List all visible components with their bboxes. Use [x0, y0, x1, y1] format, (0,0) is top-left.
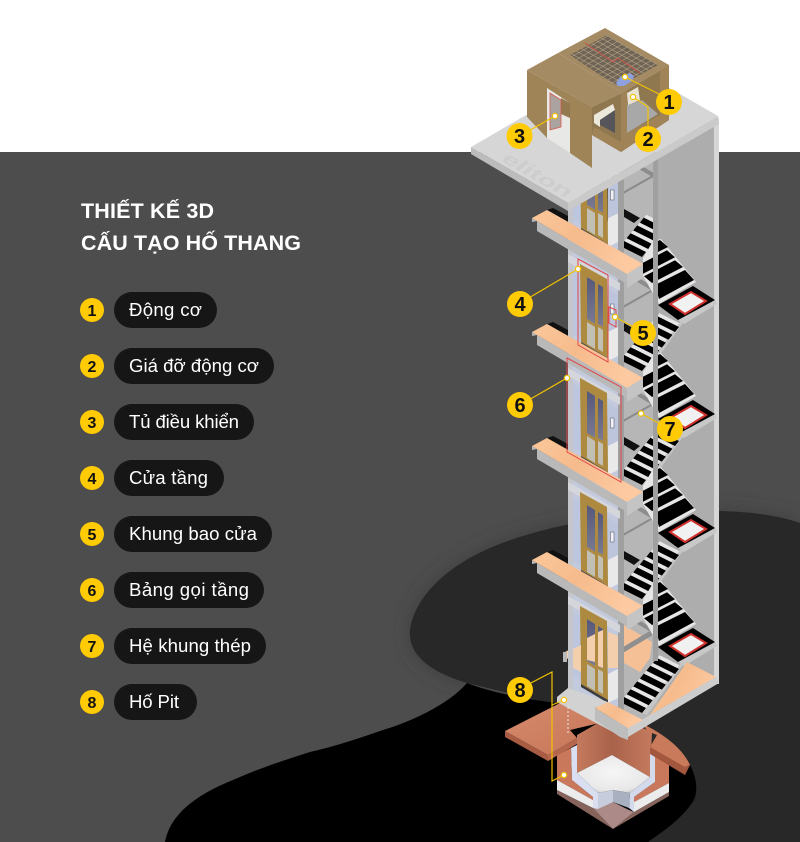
stair flights and landing level 4 — [643, 581, 717, 666]
legend item 1 — [80, 292, 217, 328]
legend item 8 — [80, 684, 197, 720]
pit rubble base — [557, 790, 669, 829]
legend item 5 — [80, 516, 272, 552]
callout 8 — [507, 672, 567, 781]
legend item 6 — [80, 572, 264, 608]
pit interior walls — [577, 715, 652, 777]
elevator pit — [505, 702, 690, 829]
legend item 7: 7 — [88, 639, 97, 656]
pit insulation lining — [571, 745, 655, 812]
blue motor — [616, 73, 634, 86]
callout 4 — [507, 266, 581, 317]
red highlight outlines — [567, 259, 621, 482]
stair flights and landing level 1 — [643, 239, 717, 324]
legend item 8: 8 — [88, 695, 97, 712]
legend item 4: Cửa tầng — [129, 467, 208, 488]
callout 2 — [630, 94, 661, 152]
right opening floor — [627, 100, 658, 133]
bottom floor slab — [595, 702, 643, 740]
legend item 4: 4 — [88, 471, 97, 488]
landing slabs — [532, 208, 643, 630]
legend item 2 — [80, 348, 274, 384]
roof mesh — [558, 28, 669, 93]
callout 8: 8 — [514, 680, 526, 702]
legend item 8: Hố Pit — [129, 691, 180, 712]
cabin right interior — [592, 65, 669, 152]
callout 7 — [638, 411, 683, 442]
machine room cabin — [527, 28, 669, 168]
callout 4: 4 — [514, 294, 526, 316]
cabin left wall — [527, 70, 592, 168]
elevator shaft column — [568, 140, 624, 723]
legend item 3 — [80, 404, 254, 440]
motor bracket — [627, 87, 640, 105]
steel posts — [653, 155, 658, 661]
steel frame braces — [623, 166, 653, 631]
legend item 1: Động cơ — [129, 299, 202, 320]
staircases — [620, 215, 717, 666]
floor door units — [568, 140, 620, 703]
bottom landing floor — [628, 662, 719, 737]
top stair flight — [624, 214, 653, 257]
terracotta ground slab left — [505, 702, 604, 761]
legend item 7: Hệ khung thép — [129, 635, 251, 656]
callout 2: 2 — [642, 129, 654, 151]
title — [81, 198, 301, 255]
dashed pit guide lines — [567, 707, 569, 733]
legend item 6: Bảng gọi tầng — [129, 579, 249, 600]
legend item 5: 5 — [88, 527, 97, 544]
legend item 2: 2 — [88, 359, 97, 376]
lowest stair flight — [620, 655, 685, 715]
stair flight level 3 — [620, 541, 685, 601]
tower plinth — [557, 688, 622, 737]
callout 7: 7 — [664, 419, 676, 441]
legend item 2: Giá đỡ động cơ — [129, 355, 259, 376]
left opening view — [547, 88, 570, 153]
callout 3: 3 — [514, 126, 525, 148]
cabin roof — [527, 53, 622, 107]
tower back wall — [622, 118, 719, 732]
callout 5 — [612, 314, 656, 346]
roof slab — [471, 60, 719, 211]
terracotta ground slab right — [643, 724, 690, 775]
title: CẤU TẠO HỐ THANG — [81, 229, 301, 255]
callout 1: 1 — [663, 92, 675, 114]
pit outer brick and white layers — [557, 748, 669, 812]
legend item 5: Khung bao cửa — [129, 523, 258, 544]
legend item 1: 1 — [88, 303, 97, 320]
stair flight level 2 — [620, 427, 685, 487]
legend item 7 — [80, 628, 266, 664]
callout 6: 6 — [514, 395, 526, 417]
cabin frame — [592, 65, 669, 152]
stair flights and landing level 3 — [643, 467, 717, 552]
stair flight level 1 — [620, 313, 685, 373]
legend item 3: Tủ điều khiển — [129, 411, 239, 432]
legend item 6: 6 — [88, 583, 97, 600]
roof logo: eliton — [496, 150, 577, 201]
callout 6 — [507, 375, 570, 418]
title: THIẾT KẾ 3D — [81, 198, 214, 223]
callout 1 — [622, 74, 682, 115]
motor unit — [594, 104, 615, 133]
legend item 4 — [80, 460, 224, 496]
legend item 3: 3 — [88, 415, 97, 432]
lower floor seen through shaft — [563, 625, 653, 672]
stair flights and landing level 2 — [643, 353, 717, 438]
callout 5: 5 — [637, 323, 649, 345]
pit floor — [577, 755, 650, 793]
control cabinet — [550, 93, 561, 130]
peach floor behind lowest door — [573, 630, 618, 672]
legend — [80, 292, 274, 720]
callout 3 — [506, 113, 558, 149]
